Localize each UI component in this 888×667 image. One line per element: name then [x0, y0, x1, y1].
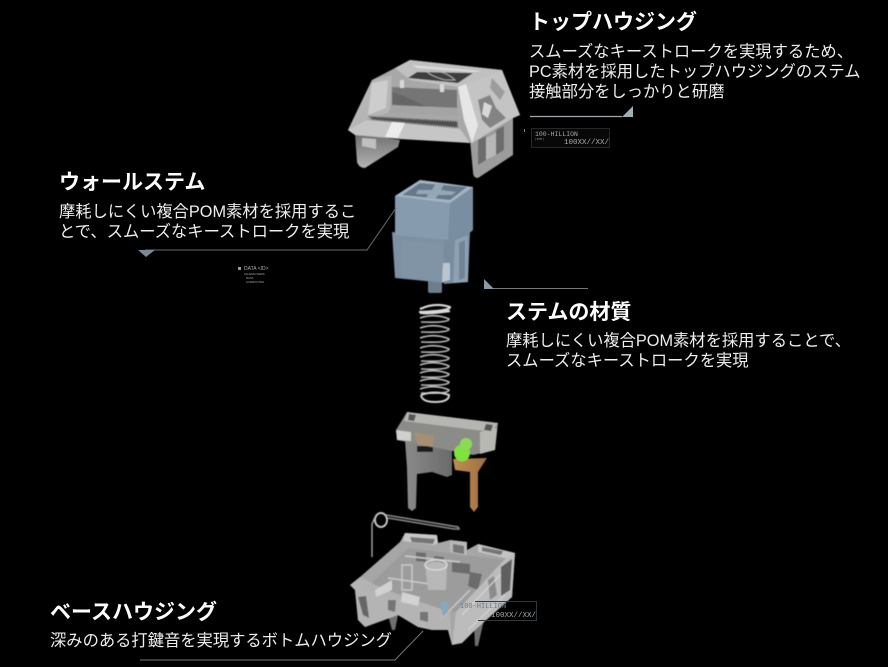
data label: small data block: DATA <ID>: [244, 266, 269, 272]
data label: 100-million top: [524, 128, 610, 148]
text: top housing description: [529, 42, 860, 101]
text: top housing description: 接触部分をしっかりと研磨: [529, 83, 724, 101]
data label: small data block: DATA: [246, 276, 254, 280]
rim: [395, 60, 502, 87]
text: stem material description: スムーズなキーストロークを実現: [506, 352, 749, 370]
heading: top housing: トップハウジング: [529, 11, 697, 34]
spring illustration: [420, 305, 450, 402]
contact assembly illustration: [396, 412, 498, 512]
contact: copper pin: [453, 458, 487, 512]
base legs: [388, 615, 484, 646]
text: top housing description: PC素材を採用したトップハウジングのステム: [529, 63, 860, 81]
data label: small data block: CHARACTERS: [244, 272, 265, 276]
stem lower left panel: [392, 232, 445, 283]
heading: wall stem: ウォールステム: [59, 171, 205, 194]
base blue accent: [440, 601, 449, 616]
text: top housing description: スムーズなキーストロークを実現するため、: [529, 43, 853, 61]
right leg: [470, 118, 513, 178]
data label: 100-million base: 100-HILLION: [460, 603, 506, 611]
text: wall stem description: [59, 202, 356, 241]
top housing illustration: [348, 60, 520, 178]
text: stem material description: 摩耗しにくい複合POM素材を採用することで、: [506, 332, 851, 350]
left leg: [355, 133, 400, 168]
leader line: wall stem: [138, 208, 396, 257]
heading: base housing: ベースハウジング: [50, 601, 217, 624]
data label: 100-million base: 100XX//XX/: [491, 612, 537, 620]
base front wall: [350, 577, 452, 645]
data label: small data block: [238, 266, 269, 284]
base right wall: [452, 553, 515, 645]
text: wall stem description: 摩耗しにくい複合POM素材を採用するこ: [59, 203, 356, 221]
base tabs: [403, 533, 438, 545]
contact: clear housing: [396, 412, 498, 455]
leader line: stem material: [484, 279, 588, 289]
data label: small data block: COMPUTING: [246, 280, 265, 284]
data label: 100-million base: [460, 602, 537, 620]
right slope: [458, 70, 520, 143]
stem upper block: [395, 180, 473, 240]
base body: [350, 533, 515, 645]
stem right wing: [444, 233, 470, 284]
torsion spring illustration: [372, 513, 459, 557]
leader line: base housing: [140, 631, 423, 660]
base housing illustration: [350, 533, 515, 646]
data label: 100-million top: 100-HILLION: [535, 131, 578, 138]
base inner floor: [364, 548, 504, 612]
front window: [392, 87, 457, 108]
contact: grey plate and pin: [405, 440, 452, 511]
roof back: [348, 60, 520, 143]
leader line: top housing: [530, 106, 633, 117]
text: wall stem description: とで、スムーズなキーストロークを実現: [59, 223, 349, 241]
contact: green LED: [454, 444, 470, 462]
tooth strip: [368, 116, 458, 128]
data label: 100-million top: 100XX//XX/: [564, 139, 610, 147]
left slope: [348, 75, 392, 130]
top opening: [408, 72, 473, 83]
text: stem material description: [506, 332, 851, 370]
lower band: [348, 120, 470, 143]
stem tab: [442, 263, 450, 282]
data label: 100-million top: [RPM]: [535, 137, 544, 141]
text: base housing description: 深みのある打鍵音を実現するボトムハウジング: [50, 632, 392, 650]
heading: stem material: ステムの材質: [506, 301, 631, 324]
stem illustration: [392, 180, 473, 293]
